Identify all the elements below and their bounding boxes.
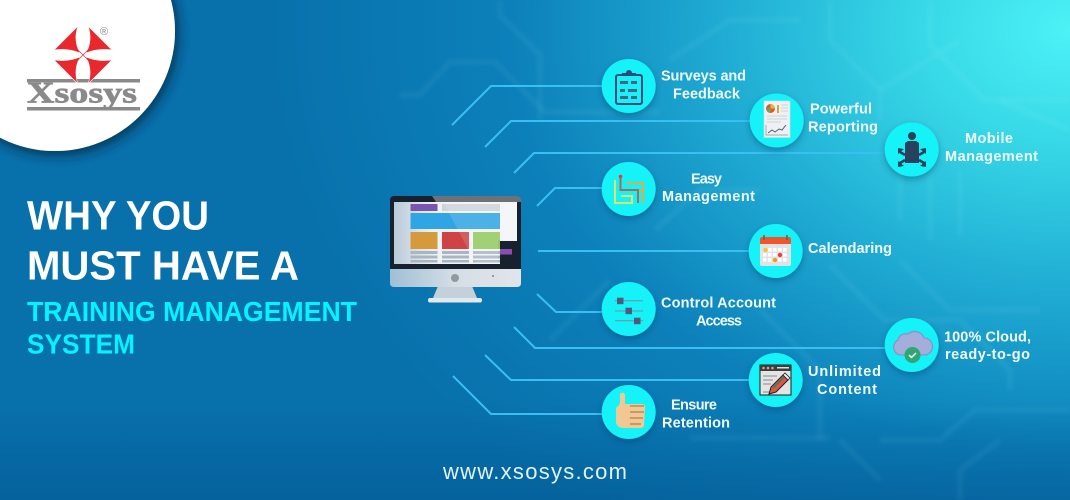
item: 100% Cloud, ready-to-go: ready-to-go	[945, 347, 1030, 363]
logo wordmark: Xsosys	[27, 77, 137, 110]
item: 100% Cloud, ready-to-go: 100% Cloud,	[944, 330, 1031, 346]
item: Easy Management: Easy	[691, 171, 722, 187]
item: Unlimited Content: Content	[817, 382, 877, 398]
item: Mobile Management: Management	[945, 149, 1038, 165]
icon: manager with arrows	[898, 132, 926, 167]
item: Control Account Access	[602, 282, 776, 336]
icon: cloud with check	[894, 331, 932, 363]
item: Surveys and Feedback	[602, 59, 746, 113]
item: Surveys and Feedback: Surveys and	[661, 69, 746, 85]
maze arrow tip	[619, 175, 622, 178]
item: Calendaring: Calendaring	[808, 241, 892, 257]
item: Ensure Retention: Ensure	[671, 397, 717, 413]
title: TRAINING MANAGEMENT	[27, 296, 357, 327]
title: MUST HAVE A	[27, 242, 299, 288]
logo mark	[54, 26, 112, 84]
title	[27, 192, 357, 359]
icon: sliders	[615, 298, 643, 324]
item: 100% Cloud, ready-to-go	[885, 318, 1031, 372]
item: Unlimited Content: Unlimited	[808, 364, 881, 380]
connector lines	[452, 86, 887, 414]
registered mark: ®	[100, 26, 108, 38]
item: Control Account Access: Control Account	[661, 295, 776, 311]
icon: thumbs up	[616, 393, 645, 428]
website url: www.xsosys.com	[442, 459, 627, 484]
item: Ensure Retention: Retention	[662, 415, 730, 431]
item: Powerful Reporting	[750, 94, 878, 148]
item: Mobile Management: Mobile	[965, 131, 1013, 147]
title: SYSTEM	[27, 328, 135, 359]
item: Mobile Management	[885, 122, 1038, 176]
icon: maze arrows	[615, 178, 643, 203]
item: Easy Management	[602, 162, 755, 216]
item: Control Account Access: Access	[696, 313, 742, 329]
icon: report	[764, 101, 790, 138]
title: WHY YOU	[27, 192, 209, 238]
item: Powerful Reporting: Reporting	[808, 120, 878, 136]
icon: monitor	[390, 196, 521, 302]
logo badge	[0, 0, 175, 151]
icon: calendar	[760, 235, 791, 266]
item: Ensure Retention	[602, 385, 730, 439]
item: Calendaring	[749, 224, 892, 278]
icon: clipboard	[616, 70, 642, 104]
item: Powerful Reporting: Powerful	[810, 101, 872, 117]
icon: pencil on window	[760, 365, 791, 395]
item: Unlimited Content	[749, 353, 881, 407]
item: Easy Management: Management	[662, 189, 755, 205]
item: Surveys and Feedback: Feedback	[673, 87, 741, 103]
